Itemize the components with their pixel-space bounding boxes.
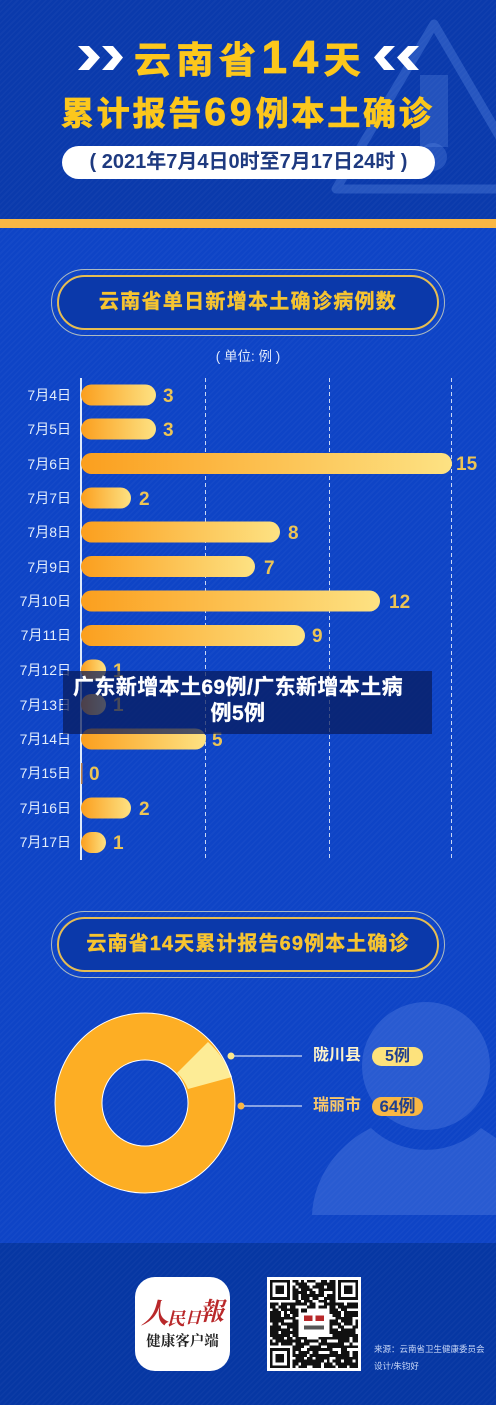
icon: person watermark [312, 1002, 496, 1215]
bar chart: 1 [113, 661, 124, 682]
logo: People's Daily Health [135, 1277, 230, 1371]
icon: warning triangle watermark [332, 20, 496, 194]
bar chart: 7月13日 [20, 697, 71, 713]
caption text [73, 676, 403, 725]
bar chart: 7月9日 [27, 559, 71, 575]
panel: header background [0, 0, 496, 219]
logo masthead: 日 [185, 1310, 201, 1327]
bar chart: 7月6日 [27, 456, 71, 472]
logo masthead: 民 [167, 1309, 185, 1329]
heading: 14 day total [51, 911, 445, 978]
bar chart: 7月4日 [27, 387, 71, 403]
leader line [238, 1102, 302, 1110]
heading: daily new cases [51, 269, 445, 336]
bar chart: 15 [456, 454, 478, 475]
bar chart: 9 [312, 626, 323, 647]
legend: Ruili [238, 1096, 423, 1116]
count pill: 64例 [380, 1097, 415, 1116]
date pill: ( 2021年7月4日0时至7月17日24时 ) [90, 151, 407, 173]
unit label: ( 单位: 例 ) [216, 349, 280, 364]
bar chart: 7月16日 [20, 800, 71, 816]
legend: Longchuan [228, 1046, 423, 1066]
date pill [62, 146, 435, 179]
logo masthead: 人 [141, 1299, 169, 1330]
donut chart [54, 1012, 236, 1194]
bar chart: 1 [113, 695, 124, 716]
credits [374, 1344, 485, 1371]
heading pill [57, 275, 439, 330]
bar chart: 8 [288, 523, 299, 544]
logo masthead: 報 [199, 1299, 224, 1326]
count pill: 5例 [385, 1048, 410, 1065]
bar chart: 1 [113, 833, 124, 854]
heading pill [57, 917, 439, 972]
accent band [0, 219, 496, 228]
bar chart: 5 [212, 730, 223, 751]
panel: footer background [0, 1243, 496, 1405]
bar chart: 7月12日 [20, 662, 71, 678]
bar chart: 7月15日 [20, 765, 71, 781]
bar chart: 2 [139, 489, 150, 510]
bar chart: 3 [163, 386, 174, 407]
QR code [267, 1277, 361, 1371]
icon: right chevrons [78, 46, 123, 70]
overlay caption [63, 671, 432, 734]
bar chart: 7月5日 [27, 421, 71, 437]
source line: 来源：云南省卫生健康委员会 [374, 1344, 485, 1354]
icon: left chevrons [374, 46, 419, 70]
bar chart [20, 378, 478, 860]
bar chart: 7月14日 [20, 731, 71, 747]
heading text: 云南省14天累计报告69例本土确诊 [86, 933, 410, 955]
bar chart: 7 [264, 558, 275, 579]
count pill [372, 1047, 423, 1066]
bar chart: 7月7日 [27, 490, 71, 506]
heading text: 云南省单日新增本土确诊病例数 [99, 291, 397, 313]
title line 1: 云南省14天 [134, 31, 366, 83]
city name: 瑞丽市 [313, 1097, 361, 1114]
caption text: 广东新增本土69例/广东新增本土病 [73, 676, 403, 699]
title line 2: 累计报告69例本土确诊 [61, 91, 435, 134]
bar chart: 7月10日 [20, 593, 71, 609]
bar chart: 0 [89, 764, 100, 785]
bar chart: 7月8日 [27, 524, 71, 540]
designer line: 设计/朱钧好 [374, 1361, 419, 1371]
bar chart: 3 [163, 420, 174, 441]
bar chart: 7月11日 [21, 627, 71, 643]
bar chart: 2 [139, 799, 150, 820]
county name: 陇川县 [313, 1047, 361, 1064]
leader line [228, 1052, 302, 1060]
bar chart: 12 [389, 592, 410, 613]
logo subtitle: 健康客户端 [146, 1334, 219, 1350]
caption text: 例5例 [211, 702, 265, 725]
logo masthead [141, 1298, 227, 1330]
panel: chart background [0, 219, 496, 1243]
bar chart: 7月17日 [20, 834, 71, 850]
